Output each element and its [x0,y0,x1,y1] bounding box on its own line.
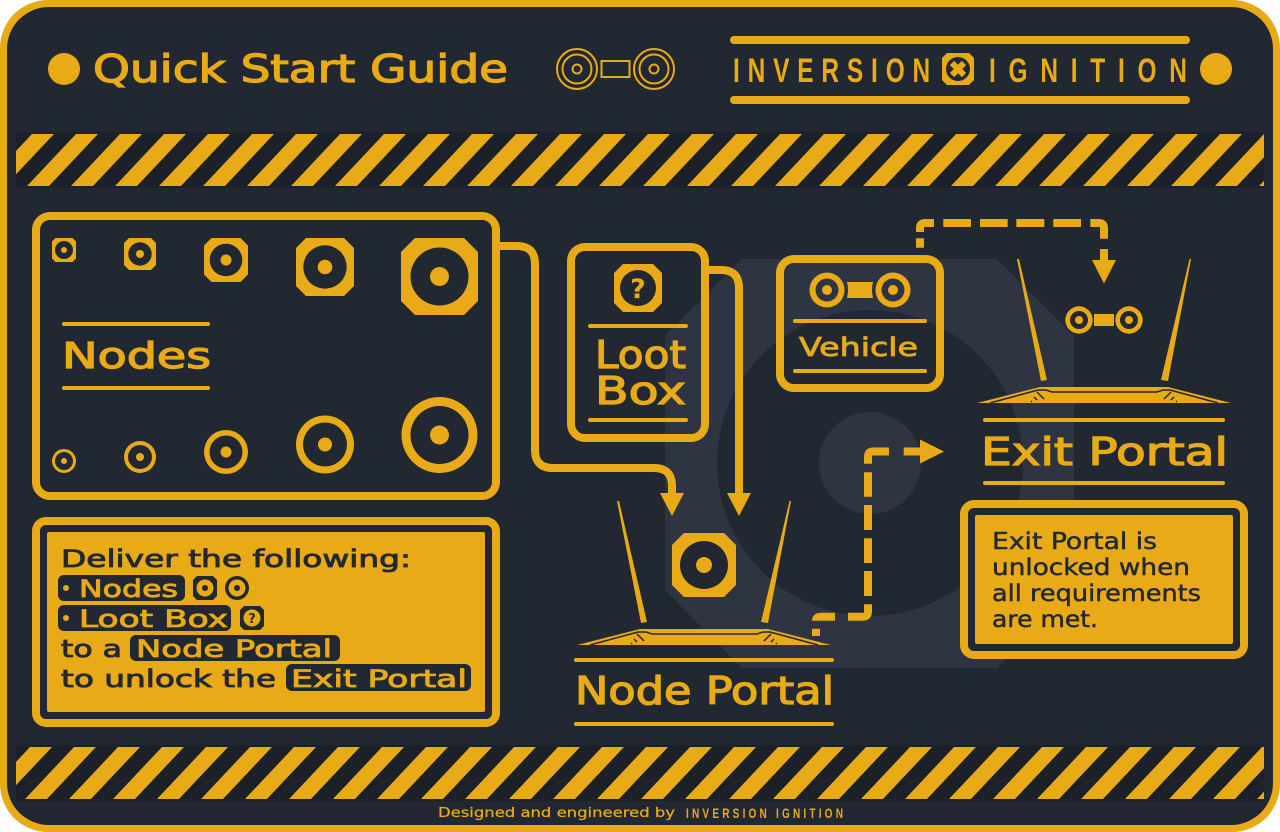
footer credit: Designed and engineered by [438,806,675,821]
arrow: vehicle to exit portal [920,223,1116,284]
header left dot [48,53,80,85]
arrow: nodes to node portal [498,246,684,516]
bottom hazard stripe [16,745,1264,801]
panel: loot box [571,247,705,438]
exit portal heading [981,418,1228,485]
brand logo: INVERSION [733,52,930,90]
node portal [574,501,834,726]
node portal heading: Node Portal [575,669,834,713]
small loot icon [240,606,264,630]
top hazard stripe [16,132,1264,188]
callout: exit portal unlock [960,500,1248,659]
footer credit [438,805,843,821]
exit portal heading: Exit Portal [981,430,1228,474]
title: Quick Start Guide [93,47,508,91]
loot box heading: Box [595,369,686,413]
pill: exit portal: Exit Portal [291,665,467,693]
callout: exit portal unlock: all requirements [992,581,1201,607]
pill: nodes [58,575,185,603]
callout: exit portal unlock: Exit Portal is [992,529,1157,555]
pill: node portal [130,635,340,663]
callout: exit portal unlock: are met. [992,607,1098,633]
panel: delivery instructions [32,517,500,727]
pill: loot box: Loot Box [79,605,228,633]
header right dot [1200,53,1232,85]
icon: large node [672,533,736,597]
vehicle heading [793,319,927,373]
small node icons [193,576,249,600]
vehicle heading: Vehicle [799,333,918,363]
line: deliver: Deliver the following: [61,545,411,573]
icon: loot box [614,264,662,312]
icon: vehicle outline [557,49,674,89]
line: to unlock the: to unlock the [61,665,276,693]
icon: loot box: ? [630,274,646,305]
icon: vehicle [810,272,910,308]
portal antennas [617,501,791,623]
loot box heading: Loot [595,333,686,377]
arrow: loot box to node portal [707,270,751,516]
small loot icon: ? [248,612,256,627]
nodes heading [62,322,211,390]
pill: node portal: Node Portal [136,635,332,663]
exit portal [977,259,1231,485]
loot box heading [588,324,688,422]
line: to a: to a [61,635,122,663]
panel: vehicle [780,259,940,388]
node portal heading [574,658,834,726]
callout: exit portal unlock: unlocked when [992,555,1190,581]
portal base [977,387,1231,403]
pill: loot box [58,605,231,633]
nodes heading: Nodes [62,336,211,377]
icon: vehicle [1065,306,1143,334]
brand logo [730,36,1190,104]
circular node icons [52,397,478,474]
footer credit: INVERSION IGNITION [686,805,843,821]
pill: nodes: Nodes [79,575,178,603]
portal base [577,629,831,645]
pill: exit portal [286,664,471,693]
panel: nodes [36,216,496,496]
background watermark emblem [665,259,1074,668]
brand logo: IGNITION [989,52,1187,90]
arrow: node portal to exit portal [816,440,944,636]
octagon node icons [52,238,478,315]
portal antennas [1017,259,1191,381]
